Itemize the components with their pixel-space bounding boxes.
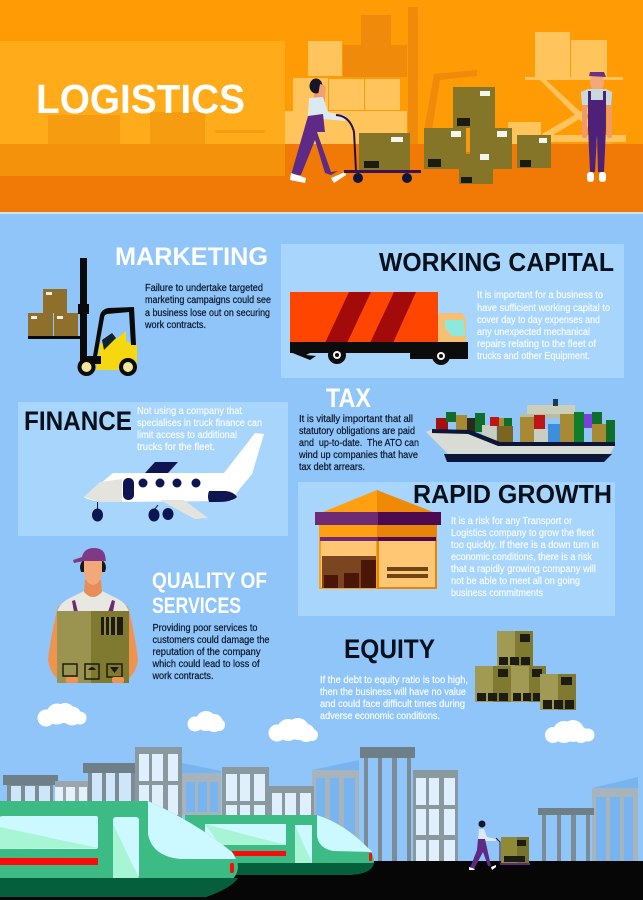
heading: quality of services [152, 568, 267, 618]
text: tax body: wind up companies that have [298, 450, 418, 461]
icon: box pile [475, 631, 576, 710]
text: rapid growth body: economic conditions, there is a risk [451, 552, 593, 563]
front train [0, 801, 238, 897]
ground [0, 861, 643, 900]
cloud 3 [268, 718, 318, 742]
text: rapid growth body: business commitments [451, 588, 543, 599]
hand cart with box [336, 115, 421, 183]
section: tax [298, 383, 615, 473]
text: working capital body: cover day to day expenses and [477, 315, 600, 326]
text: rapid growth body: Logistics company to grow the fleet [451, 528, 594, 539]
text: finance body: Not using a company that [137, 406, 242, 417]
text: equity body: If the debt to equity ratio is too high, [320, 675, 468, 686]
heading: working capital: WORKING CAPITAL [379, 247, 614, 277]
text: finance body: trucks for the fleet. [137, 442, 215, 453]
icon: delivery truck [290, 292, 468, 365]
text: equity body [320, 675, 468, 722]
icon: forklift [28, 258, 137, 376]
heading: rapid growth: RAPID GROWTH [413, 479, 612, 509]
cloud 4 [545, 720, 594, 743]
grey buildings [3, 747, 594, 863]
text: marketing body: work contracts. [144, 320, 206, 331]
text: working capital body: It is important for a business to [477, 290, 603, 301]
text: tax body: It is vitally important that all [299, 414, 413, 425]
panel: working capital [281, 244, 624, 378]
icon: warehouse [315, 490, 441, 589]
text: rapid growth body: not be able to meet all on going [451, 576, 580, 587]
icon: airplane [84, 433, 264, 522]
text: tax body: statutory obligations are paid [299, 426, 415, 437]
text: finance body [137, 406, 262, 453]
walking worker [290, 78, 346, 183]
section: marketing [28, 243, 271, 376]
header banner [0, 0, 643, 214]
text: finance body: limit access to additional [137, 430, 237, 441]
heading: equity: EQUITY [344, 634, 435, 664]
heading: quality of services: SERVICES [152, 593, 241, 618]
text: rapid growth body: that a rapidly growing company will [451, 564, 596, 575]
text: quality body: work contracts. [152, 671, 214, 682]
text: working capital body [477, 290, 610, 362]
rear train [185, 815, 374, 875]
text: quality body: reputation of the company [152, 647, 260, 658]
section: equity [320, 631, 576, 722]
city skyline [3, 747, 638, 865]
text: finance body: specialises in truck finance can [137, 418, 262, 429]
title: LOGISTICS [36, 76, 245, 122]
standing worker [581, 72, 612, 182]
panel: finance [18, 402, 288, 536]
text: equity body: adverse economic conditions. [320, 711, 440, 722]
text: rapid growth body: too quickly. If there is a down turn in [451, 540, 599, 551]
icon: container ship [426, 399, 615, 462]
text: rapid growth body: It is a risk for any Transport or [451, 516, 573, 527]
heading: marketing: MARKETING [115, 243, 268, 271]
text: quality body: Providing poor services to [152, 623, 258, 634]
text: rapid growth body [451, 516, 599, 599]
icon: delivery man with box [48, 548, 138, 683]
text: quality body: which could lead to loss of [152, 659, 260, 670]
heading: tax: TAX [326, 383, 371, 413]
text: marketing body [144, 283, 271, 331]
text: working capital body: trucks and other Equipment. [477, 351, 590, 362]
cloud 1 [38, 703, 86, 726]
text: marketing body: Failure to undertake targeted [145, 283, 263, 294]
text: equity body: and could face difficult times during [320, 699, 465, 710]
section: quality of services [48, 548, 270, 683]
clouds [38, 703, 594, 743]
stacked boxes [424, 87, 551, 184]
heading: finance: FINANCE [24, 406, 132, 436]
cloud 2 [188, 711, 225, 732]
heading: quality of services: QUALITY OF [152, 568, 267, 593]
text: quality body [152, 623, 270, 682]
small worker with cart [469, 820, 530, 870]
text: equity body: then the business will have no value [320, 687, 466, 698]
text: tax body: and up-to-date. The ATO can [299, 438, 419, 449]
text: working capital body: have sufficient working capital to [477, 303, 610, 314]
panel: rapid growth [298, 479, 615, 616]
warehouse silhouette background [270, 7, 626, 156]
text: tax body: tax debt arrears. [299, 462, 365, 473]
text: marketing body: a business lose out on securing [145, 308, 270, 319]
text: working capital body: any unexpected mechanical [477, 327, 590, 338]
title panel [0, 41, 285, 176]
text: quality body: customers could damage the [152, 635, 270, 646]
pale buildings [182, 760, 638, 865]
text: tax body [298, 414, 419, 473]
text: working capital body: repairs relating to the fleet of [477, 339, 596, 350]
text: marketing body: marketing campaigns could see [145, 295, 271, 306]
